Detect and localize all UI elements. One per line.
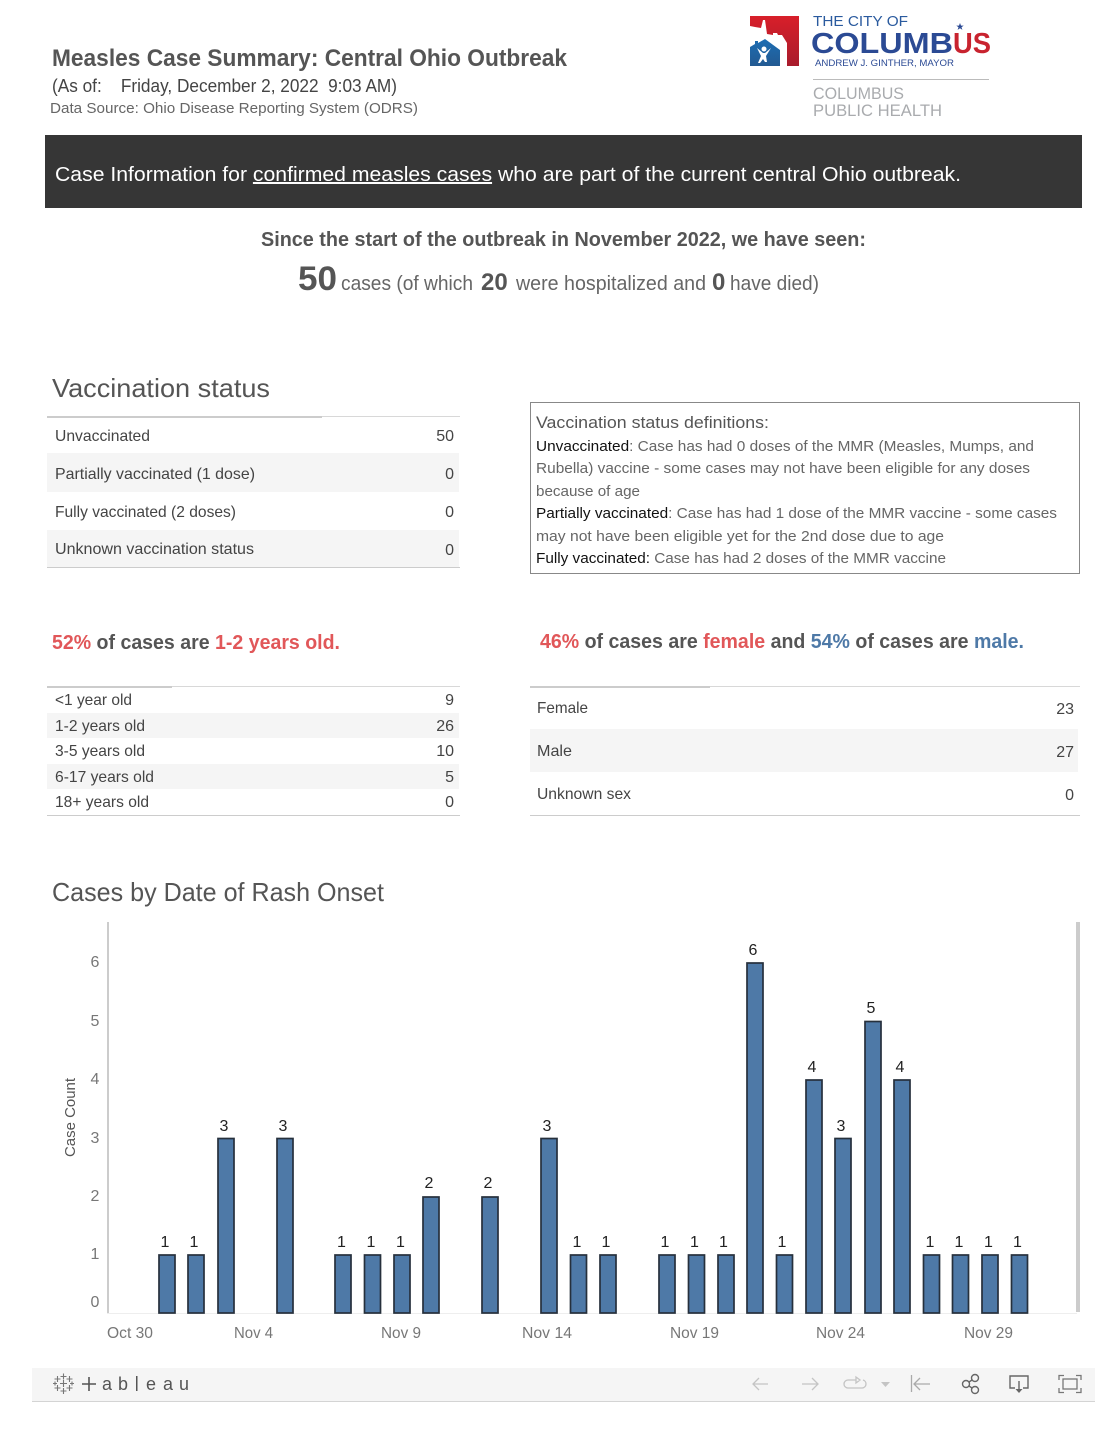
table: age groups: 3-5 years old xyxy=(55,743,145,760)
y axis title: Case Count xyxy=(63,1078,79,1157)
bar value labels: 5 xyxy=(867,1000,876,1017)
logo: City of Columbus Public Health: ANDREW J. GINTHER, MAYOR xyxy=(815,58,954,69)
y axis labels: 2 xyxy=(91,1188,100,1205)
panel: vaccination status definitions: Rubella) vaccine - some cases may not have been eligible for any doses xyxy=(536,460,1030,477)
icon: fullscreen xyxy=(1059,1376,1081,1392)
logo: City of Columbus Public Health xyxy=(750,14,991,120)
bar value labels: 1 xyxy=(396,1234,405,1251)
table: vaccination status: Fully vaccinated (2 doses) xyxy=(55,504,236,521)
logo: City of Columbus Public Health: COLUMB xyxy=(811,28,953,60)
y axis labels: 1 xyxy=(91,1246,100,1263)
summary statement xyxy=(261,229,866,298)
title: Measles Case Summary: Central Ohio Outbreak xyxy=(52,45,568,72)
bar value labels: 1 xyxy=(719,1234,728,1251)
bar value labels: 3 xyxy=(543,1118,552,1135)
y axis labels: 3 xyxy=(91,1130,100,1147)
banner: Case Information for confirmed measles cases who are part of the current central Ohio outbreak. xyxy=(55,164,961,186)
panel: vaccination status definitions xyxy=(530,402,1080,574)
table: sex: 0 xyxy=(1065,787,1074,804)
bar value labels: 1 xyxy=(602,1234,611,1251)
table: age groups: 18+ years old xyxy=(55,794,149,811)
summary statement: 50 xyxy=(298,260,337,298)
table: vaccination status: 0 xyxy=(445,542,454,559)
bar value labels: 1 xyxy=(1013,1234,1022,1251)
table: sex: Unknown sex xyxy=(537,786,631,803)
table: age groups: 5 xyxy=(445,769,454,786)
table: sex: Female xyxy=(537,700,588,717)
x axis labels: Nov 4 xyxy=(234,1325,273,1342)
bar value labels: 3 xyxy=(279,1118,288,1135)
table: age groups: <1 year old xyxy=(55,692,132,709)
summary statement: Since the start of the outbreak in November 2022, we have seen: xyxy=(261,229,866,251)
as-of date: (As of: Friday, December 2, 2022 9:03 AM) xyxy=(52,76,397,96)
bar value labels: 1 xyxy=(661,1234,670,1251)
heading: vaccination status: Vaccination status xyxy=(52,373,270,403)
bar value labels: 1 xyxy=(778,1234,787,1251)
title block xyxy=(50,45,568,117)
x axis labels: Oct 30 xyxy=(107,1325,153,1342)
toolbar xyxy=(32,1368,1095,1402)
table: age groups: 6-17 years old xyxy=(55,769,154,786)
heading: age summary: 52% of cases are 1-2 years old. xyxy=(52,632,340,654)
icon: share xyxy=(962,1374,978,1394)
tableau wordmark: e xyxy=(146,1374,156,1394)
x axis labels xyxy=(107,1325,1013,1342)
bar value labels: 4 xyxy=(808,1059,817,1076)
summary statement: 20 xyxy=(481,269,508,296)
bar value labels: 1 xyxy=(161,1234,170,1251)
summary statement: cases (of which xyxy=(341,273,473,295)
summary statement: have died) xyxy=(730,273,819,295)
panel: vaccination status definitions: Vaccination status definitions: xyxy=(536,413,769,432)
icon: undo xyxy=(753,1378,768,1390)
bar value labels: 1 xyxy=(926,1234,935,1251)
bar value labels: 1 xyxy=(190,1234,199,1251)
x axis labels: Nov 19 xyxy=(670,1325,719,1342)
icon: dropdown xyxy=(881,1382,890,1387)
y axis labels: 0 xyxy=(91,1294,100,1311)
bar value labels: 3 xyxy=(837,1118,846,1135)
banner xyxy=(45,135,1082,208)
panel: vaccination status definitions: Fully vaccinated: Case has had 2 doses of the MMR vaccine xyxy=(536,550,946,567)
y axis labels: 6 xyxy=(91,954,100,971)
bar value labels: 1 xyxy=(573,1234,582,1251)
x axis labels: Nov 24 xyxy=(816,1325,865,1342)
tableau wordmark: a xyxy=(102,1374,113,1394)
table: vaccination status: 0 xyxy=(445,466,454,483)
table: age groups: 10 xyxy=(436,743,454,760)
table: age groups xyxy=(47,686,460,816)
table: vaccination status: Partially vaccinated (1 dose) xyxy=(55,466,255,483)
table: sex: 27 xyxy=(1056,744,1074,761)
table: vaccination status xyxy=(47,416,460,568)
x axis labels: Nov 9 xyxy=(381,1325,421,1342)
x axis labels: Nov 14 xyxy=(522,1325,572,1342)
panel: vaccination status definitions: Unvaccinated: Case has had 0 doses of the MMR (Measles, Mumps, and xyxy=(536,438,1034,455)
table: sex: Male xyxy=(537,743,572,760)
heading: cases by date of rash onset: Cases by Date of Rash Onset xyxy=(52,877,385,907)
bar value labels: 1 xyxy=(367,1234,376,1251)
table: vaccination status: Unknown vaccination status xyxy=(55,541,254,558)
panel: vaccination status definitions: Partially vaccinated: Case has had 1 dose of the MMR vaccine - some cases xyxy=(536,505,1057,522)
tableau wordmark: a xyxy=(163,1374,174,1394)
icon: download xyxy=(1010,1376,1028,1393)
table: vaccination status: Unvaccinated xyxy=(55,428,150,445)
logo: City of Columbus Public Health: PUBLIC HEALTH xyxy=(813,102,942,120)
y axis labels: 5 xyxy=(91,1013,100,1030)
logo: City of Columbus Public Health: THE CITY OF xyxy=(813,14,908,30)
table: age groups: 1-2 years old xyxy=(55,718,145,735)
bars xyxy=(159,963,1028,1313)
bar value labels: 2 xyxy=(425,1175,434,1192)
icon: revert xyxy=(912,1375,930,1392)
summary statement: 0 xyxy=(712,269,725,296)
table: age groups: 26 xyxy=(436,718,454,735)
table: age groups: 9 xyxy=(445,692,454,709)
bar value labels: 4 xyxy=(896,1059,905,1076)
tableau wordmark: u xyxy=(179,1374,189,1394)
bar value labels: 1 xyxy=(955,1234,964,1251)
panel: vaccination status definitions: may not have been eligible yet for the 2nd dose due to age xyxy=(536,528,944,545)
summary statement: were hospitalized and xyxy=(515,273,706,295)
tableau wordmark xyxy=(82,1374,189,1394)
bar value labels: 3 xyxy=(220,1118,229,1135)
table: vaccination status: 0 xyxy=(445,504,454,521)
icon: tableau mark xyxy=(53,1374,74,1394)
bar value labels: 1 xyxy=(337,1234,346,1251)
bar value labels xyxy=(161,942,1022,1251)
table: sex: 23 xyxy=(1056,701,1074,718)
x axis labels: Nov 29 xyxy=(964,1325,1013,1342)
bar chart: cases by date of rash onset xyxy=(63,922,1080,1342)
icon: replay xyxy=(844,1377,866,1388)
tableau wordmark: b xyxy=(118,1374,128,1394)
icon: redo xyxy=(802,1378,818,1390)
y axis labels: 4 xyxy=(91,1071,100,1088)
y axis labels xyxy=(91,954,100,1311)
table: sex xyxy=(530,686,1080,816)
logo: City of Columbus Public Health: US xyxy=(953,28,991,60)
table: age groups: 0 xyxy=(445,794,454,811)
bar value labels: 2 xyxy=(484,1175,493,1192)
bar value labels: 1 xyxy=(984,1234,993,1251)
heading: sex summary: 46% of cases are female and 54% of cases are male. xyxy=(540,631,1024,653)
icon: skyline and house xyxy=(750,16,799,66)
bar value labels: 6 xyxy=(749,942,758,959)
table: vaccination status: 50 xyxy=(436,428,454,445)
logo: City of Columbus Public Health: COLUMBUS xyxy=(813,85,904,103)
bar value labels: 1 xyxy=(690,1234,699,1251)
panel: vaccination status definitions: because of age xyxy=(536,483,640,500)
data source: Data Source: Ohio Disease Reporting System (ODRS) xyxy=(50,100,418,117)
